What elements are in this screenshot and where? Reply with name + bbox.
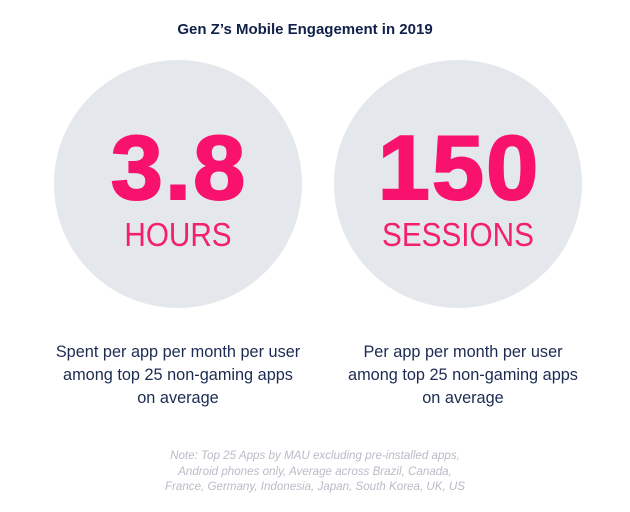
text block: hours description: among top 25 non-gaming apps (63, 366, 293, 384)
note: Android phones only, Average across Brazil, Canada, (178, 464, 452, 478)
text block: sessions description: Per app per month per user (363, 343, 563, 361)
text block: sessions description: on average (422, 389, 504, 407)
text block: sessions description: among top 25 non-gaming apps (348, 366, 578, 384)
note (165, 449, 465, 493)
big number: 150: 150 (378, 118, 540, 219)
note: France, Germany, Indonesia, Japan, South Korea, UK, US (165, 480, 465, 493)
text block: sessions description (348, 343, 578, 407)
label: hours: HOURS (124, 216, 232, 253)
big number: 3.8: 3.8 (111, 118, 247, 219)
title: Gen Z’s Mobile Engagement in 2019 (177, 21, 433, 38)
note: Note: Top 25 Apps by MAU excluding pre-installed apps, (170, 449, 460, 462)
text block: hours description: Spent per app per month per user (56, 343, 300, 361)
panel: hours stat circle (54, 60, 302, 308)
text block: hours description: on average (137, 389, 219, 407)
label: sessions: SESSIONS (382, 216, 534, 253)
panel: sessions stat circle (334, 60, 582, 308)
text block: hours description (56, 343, 300, 407)
